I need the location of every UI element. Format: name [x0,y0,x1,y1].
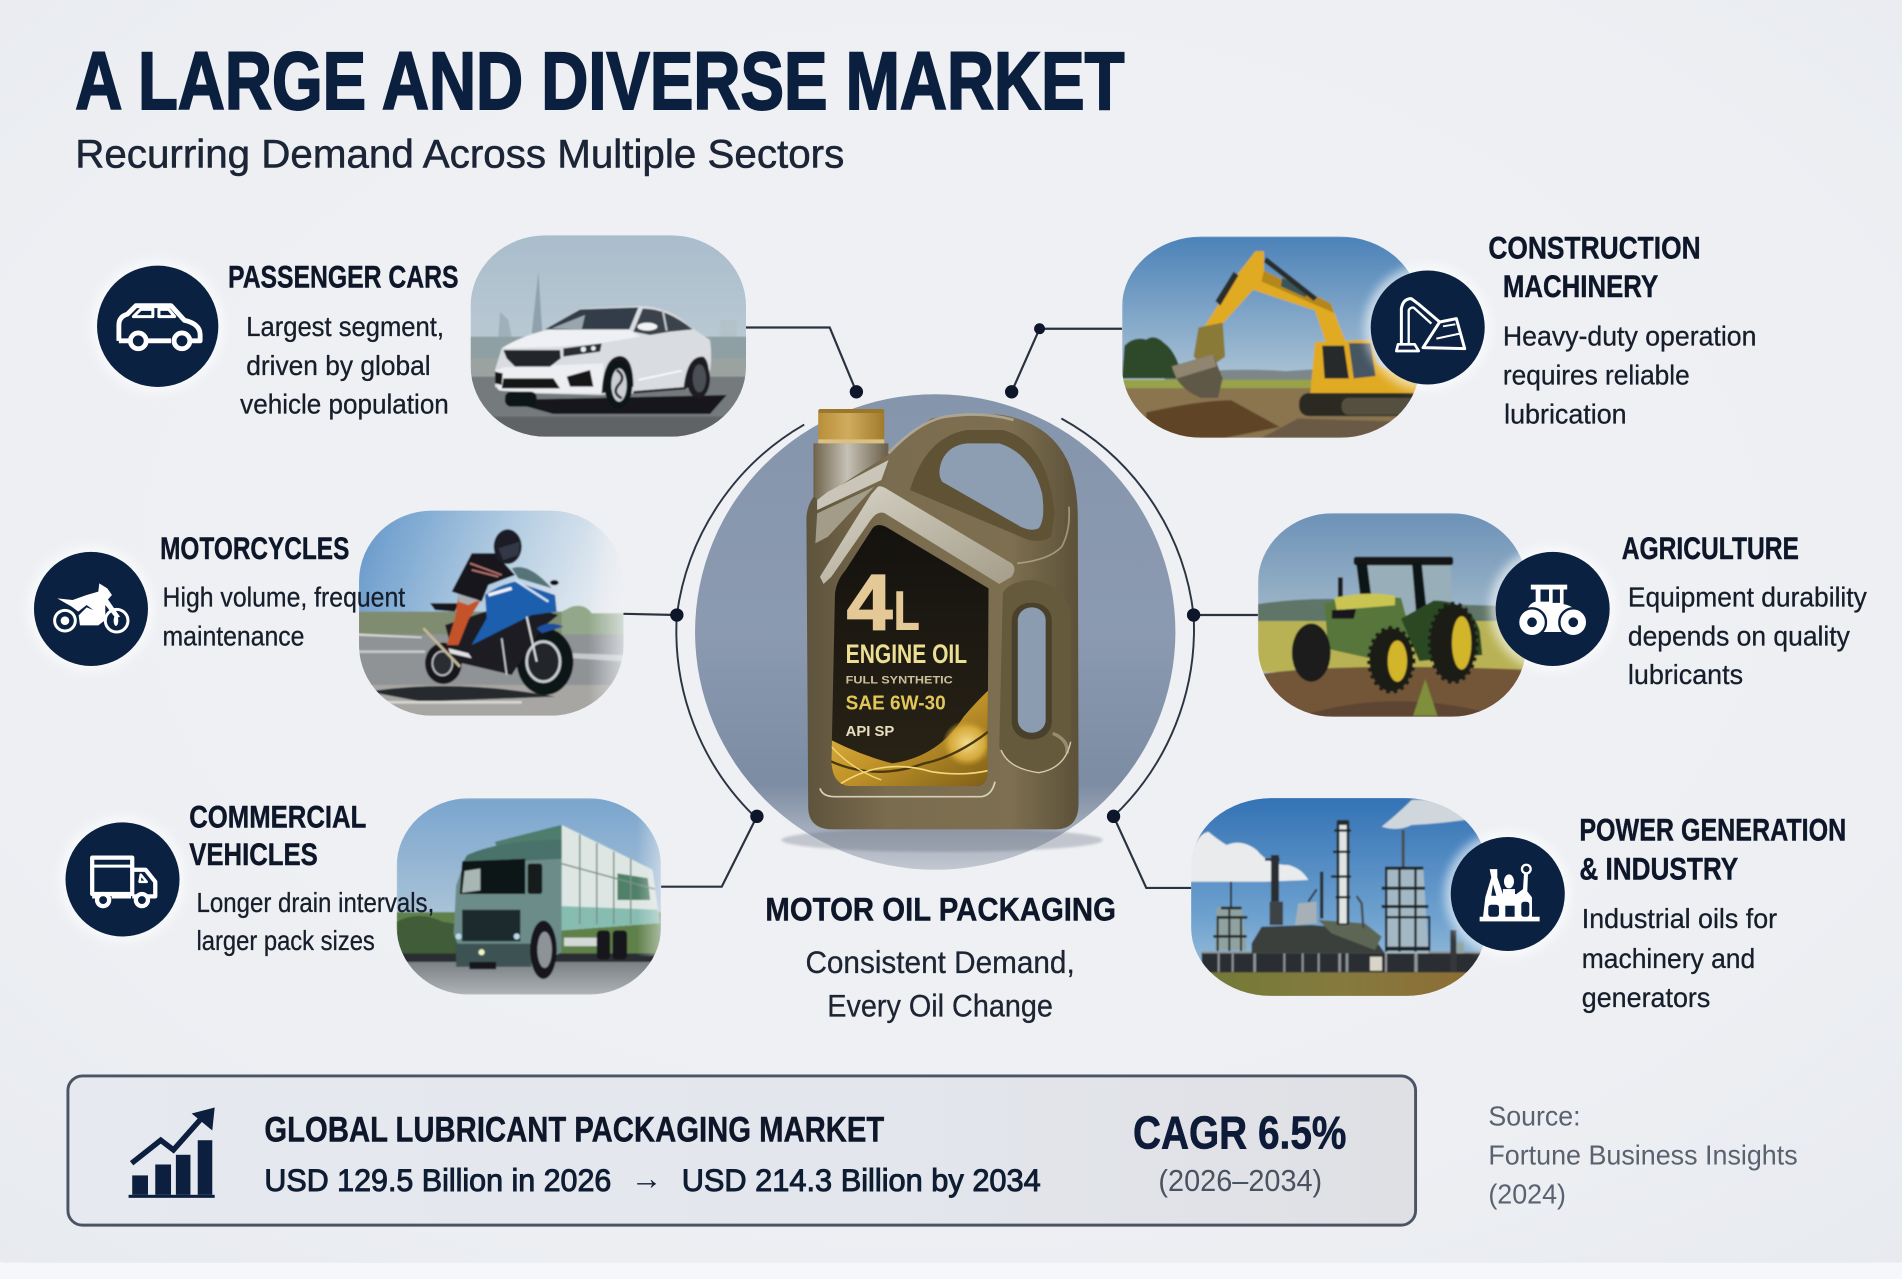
icon: industry [1445,831,1571,957]
panel: market size [68,1076,1416,1225]
source note: Source: [1488,1101,1581,1132]
photo: tractor [1258,513,1526,717]
label [1488,229,1756,429]
photo: motorcycle [355,505,635,720]
label [1579,812,1846,1013]
label: SAE 6W-30 [846,692,946,715]
oil swirl [832,690,988,786]
label [828,525,1001,788]
label: Industrial oils for [1582,903,1777,934]
market forecast: USD 214.3 Billion by 2034 [682,1162,1041,1198]
photo: refinery [1191,798,1483,996]
panel: agriculture [1258,513,1867,717]
source note [1488,1101,1798,1209]
photo: excavator [1122,237,1420,438]
label: PASSENGER CARS [228,258,459,294]
icon: car [91,260,224,393]
label: High volume, frequent [163,582,405,613]
label: Largest segment, [246,311,444,342]
label: MACHINERY [1503,268,1658,304]
panel: passenger cars [91,230,750,443]
market forecast: → [631,1160,662,1196]
icon: truck [59,816,186,943]
label: VEHICLES [189,836,318,872]
label: CONSTRUCTION [1488,229,1701,265]
label: AGRICULTURE [1622,530,1799,566]
label [228,258,459,420]
label text: 4 [847,559,892,647]
label: FULL SYNTHETIC [846,674,953,686]
bottle [781,409,1103,852]
label: & INDUSTRY [1579,850,1738,886]
side grip [999,580,1071,773]
market forecast: USD 129.5 Billion in 2026 [264,1162,611,1198]
icon: growth chart [129,1107,215,1198]
label [1622,530,1867,690]
label: L [894,580,920,642]
label: generators [1582,982,1710,1013]
label: Heavy-duty operation [1503,321,1756,352]
disc caption [765,891,1116,1024]
label: ENGINE OIL [846,639,967,669]
market heading: GLOBAL LUBRICANT PACKAGING MARKET [264,1110,885,1149]
label: API SP [846,723,894,740]
label: larger pack sizes [197,925,375,956]
label: Longer drain intervals, [197,887,434,918]
subtitle: Recurring Demand Across Multiple Sectors [75,132,844,176]
label: machinery and [1582,943,1755,974]
photo: white car [470,230,750,443]
source note: (2024) [1488,1178,1566,1209]
icon: excavator [1365,264,1491,391]
disc caption: MOTOR OIL PACKAGING [765,891,1116,928]
label: COMMERCIAL [189,798,366,834]
panel: commercial vehicles [59,798,664,995]
label: MOTORCYCLES [160,530,349,566]
source note: Fortune Business Insights [1488,1139,1798,1170]
label: vehicle population [240,389,449,420]
CAGR period: (2026–2034) [1158,1165,1322,1198]
title: A LARGE AND DIVERSE MARKET [75,36,1124,127]
label: requires reliable [1503,360,1690,391]
outer ring arcs [670,418,1200,823]
handle [910,430,1055,541]
panel: motorcycles [28,505,635,720]
connector lines [623,323,1258,888]
label [160,530,405,651]
label: driven by global [246,350,431,381]
label: depends on quality [1628,620,1850,651]
label: maintenance [163,620,304,651]
market forecast [264,1160,1041,1198]
label: Equipment durability [1628,582,1867,613]
central disc with bottle [670,394,1200,1024]
icon: tractor [1490,546,1616,672]
disc caption: Consistent Demand, [805,944,1075,980]
disc [695,394,1175,870]
icon: motorcycle [28,546,154,672]
CAGR: CAGR 6.5% [1133,1107,1346,1159]
disc caption: Every Oil Change [827,988,1053,1024]
label: lubrication [1504,398,1627,429]
label: lubricants [1628,659,1743,690]
label [189,798,434,956]
photo: truck [397,798,664,995]
panel: construction machinery [1122,229,1756,438]
cap [818,409,884,443]
panel: power generation and industry [1185,790,1846,1013]
